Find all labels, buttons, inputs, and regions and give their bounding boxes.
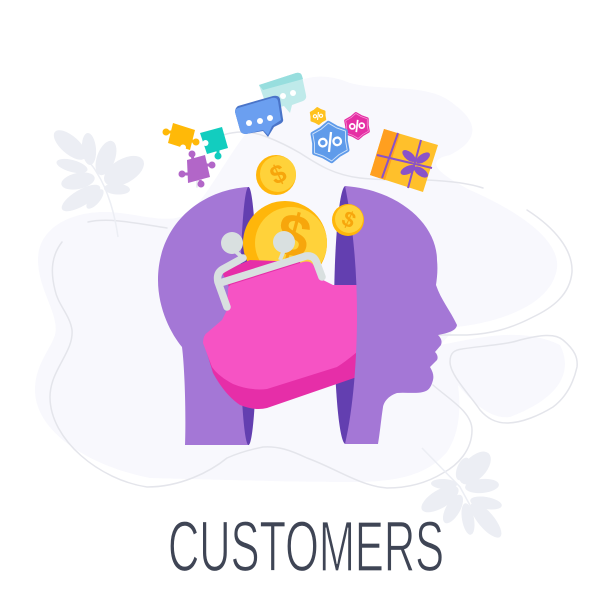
background outline curves (50, 132, 577, 488)
speech bubble: blue (235, 96, 283, 137)
purse base (206, 340, 357, 409)
speech bubble: teal (259, 73, 306, 113)
badge: pink discount (345, 113, 369, 139)
head: right profile (345, 186, 457, 444)
head interior: right (334, 186, 357, 444)
purse back (222, 260, 310, 300)
background blobs (35, 77, 565, 482)
purse front (203, 262, 357, 389)
puzzle piece: orange (162, 123, 200, 150)
gift bow (399, 148, 432, 180)
plant top left (49, 125, 149, 237)
puzzle piece: purple (178, 150, 216, 188)
purse (203, 231, 357, 409)
puzzle piece: teal (200, 127, 228, 160)
gift box (370, 129, 438, 192)
purse frame (218, 256, 322, 307)
coin: large (243, 199, 327, 285)
purse clasps (221, 231, 295, 260)
head interior: left (240, 187, 257, 445)
coin: large: $ (268, 199, 318, 272)
coin: right: $ (338, 206, 360, 233)
badge: blue discount (312, 122, 348, 162)
coin: top: $ (265, 157, 291, 191)
coin: right (332, 204, 364, 236)
title: CUSTOMERS (168, 508, 444, 587)
head: left half (158, 187, 249, 445)
plant bottom right (417, 446, 506, 542)
badge: small orange discount (310, 107, 326, 125)
coin: top (256, 155, 296, 195)
